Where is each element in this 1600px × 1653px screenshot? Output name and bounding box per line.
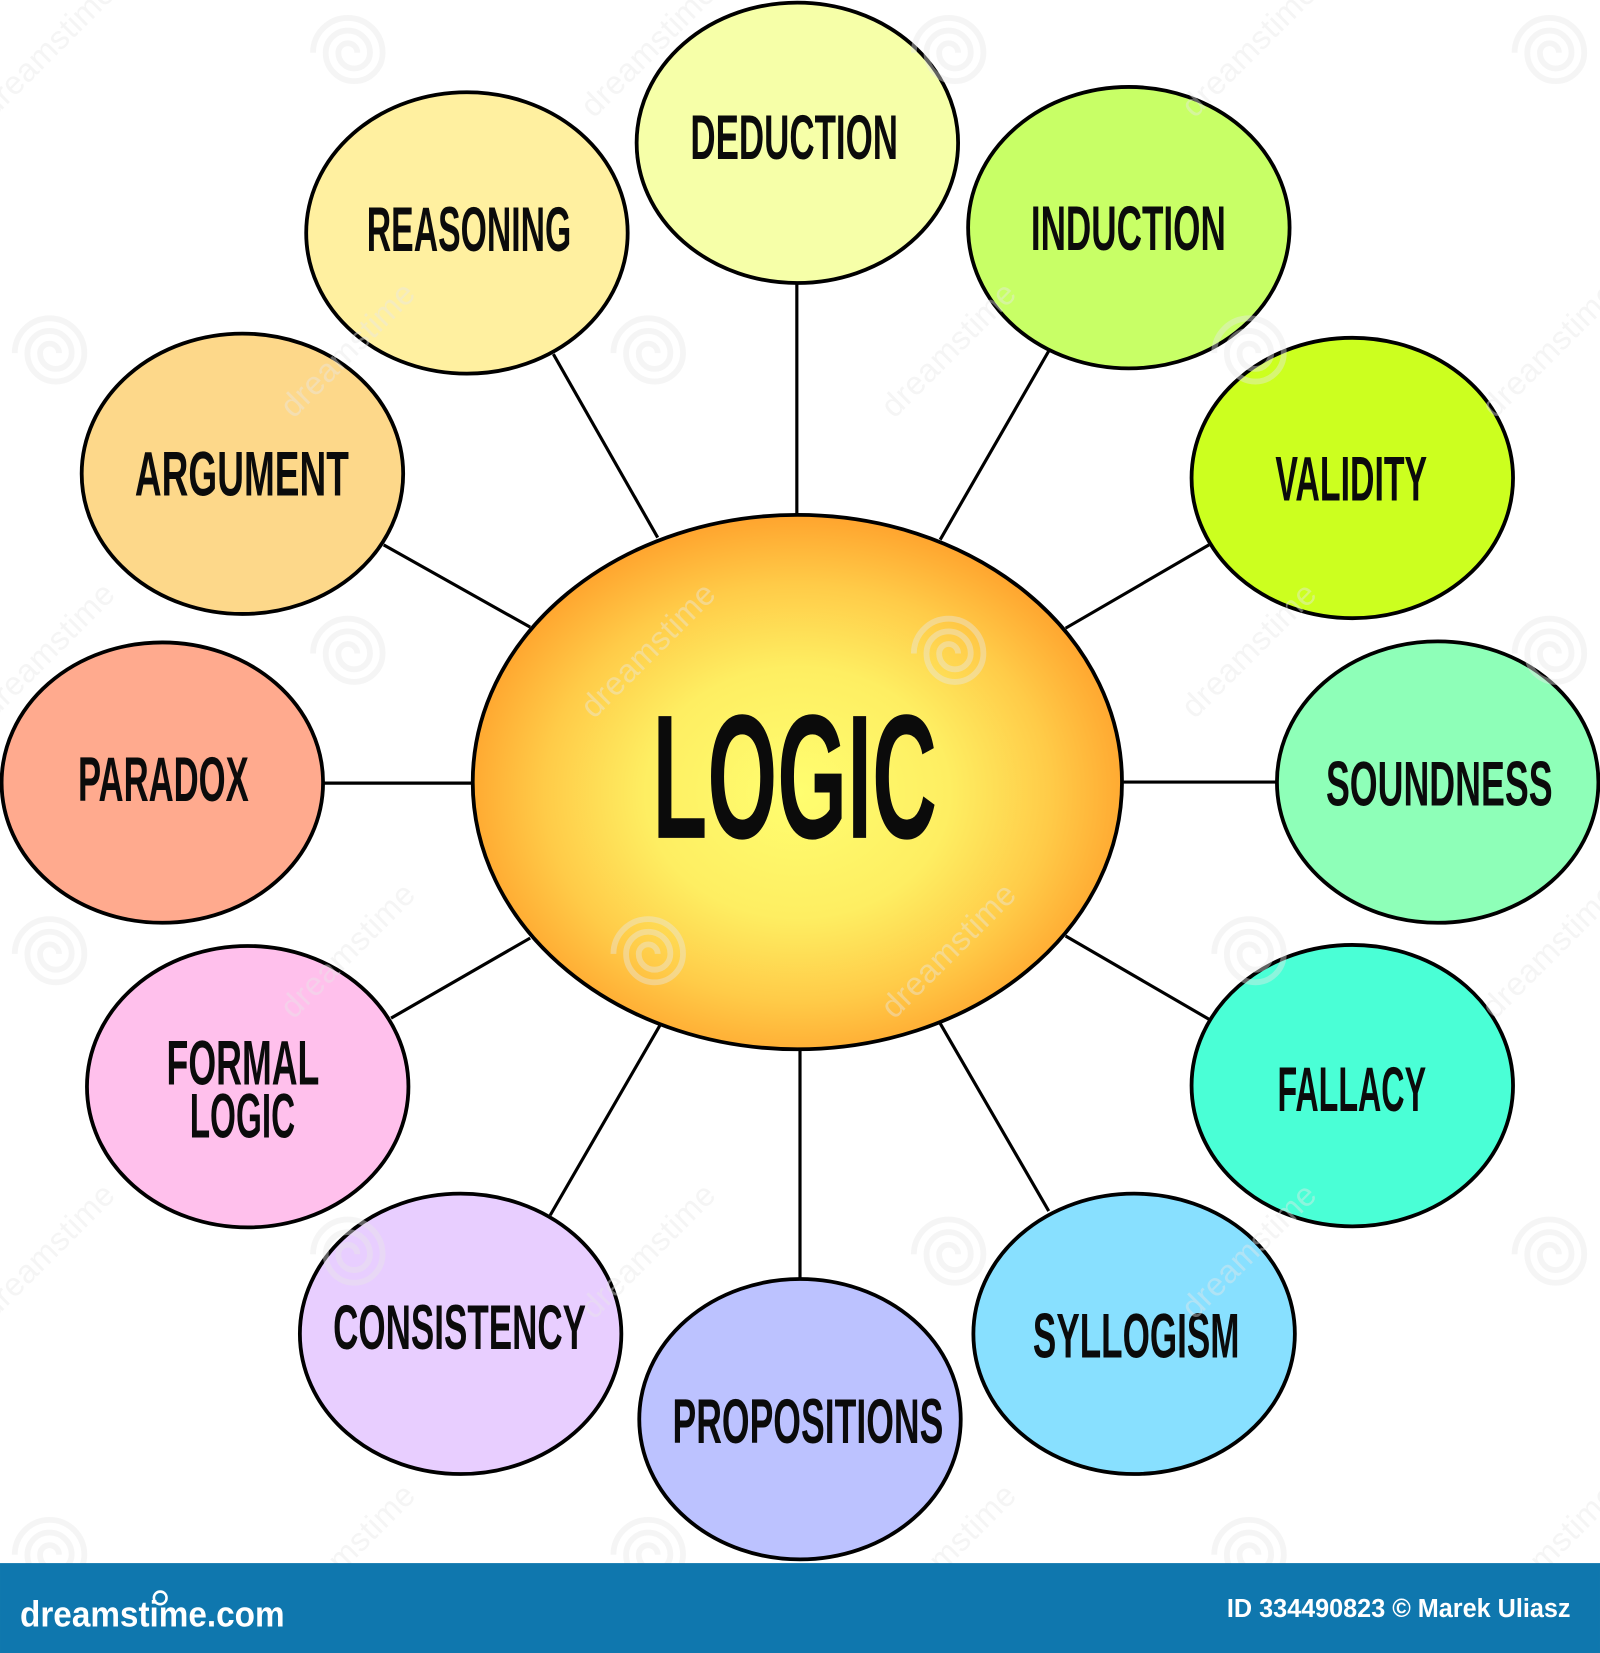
node: deduction: DEDUCTION xyxy=(690,103,898,173)
node: formal logic: FORMAL xyxy=(167,1029,319,1099)
footer bar xyxy=(0,1563,1600,1653)
watermark text: dreamstime xyxy=(873,875,1023,1025)
node: fallacy xyxy=(1192,945,1513,1226)
watermark text: dreamstime xyxy=(873,274,1023,424)
watermark text: dreamstime xyxy=(1173,575,1323,725)
watermark text: dreamstime xyxy=(272,274,422,424)
node: paradox xyxy=(2,642,323,923)
node: argument: ARGUMENT xyxy=(135,439,349,509)
node: induction: INDUCTION xyxy=(1031,194,1226,264)
node: propositions xyxy=(639,1279,961,1559)
node: argument xyxy=(82,334,403,614)
connector lines xyxy=(323,282,1277,1280)
watermark text: dreamstime xyxy=(1173,1175,1323,1325)
node: consistency xyxy=(300,1194,621,1474)
node: paradox: PARADOX xyxy=(78,745,249,815)
node: formal logic xyxy=(87,946,408,1227)
node: propositions: PROPOSITIONS xyxy=(672,1387,943,1457)
footer logo: dreamstime.com xyxy=(20,1594,285,1634)
node: reasoning: REASONING xyxy=(367,195,571,265)
node: reasoning xyxy=(306,92,628,374)
node: validity: VALIDITY xyxy=(1275,445,1427,515)
node: deduction xyxy=(637,3,958,283)
watermark text: dreamstime xyxy=(873,1476,1023,1626)
node: formal logic: LOGIC xyxy=(190,1081,295,1151)
central node: logic: LOGIC xyxy=(652,678,937,876)
node: syllogism xyxy=(973,1194,1295,1474)
node: soundness xyxy=(1277,641,1598,923)
watermark text: dreamstime xyxy=(573,575,722,725)
watermark text: dreamstime xyxy=(272,875,422,1025)
central node: logic xyxy=(473,515,1122,1049)
footer credit: ID 334490823 © Marek Uliasz xyxy=(1227,1593,1570,1623)
node: consistency: CONSISTENCY xyxy=(333,1293,586,1363)
watermark text: dreamstime xyxy=(573,1175,722,1325)
node: syllogism: SYLLOGISM xyxy=(1033,1302,1240,1372)
node: induction xyxy=(968,87,1290,368)
node: fallacy: FALLACY xyxy=(1277,1055,1426,1125)
node: validity xyxy=(1192,338,1513,618)
watermark text: dreamstime xyxy=(272,1476,422,1626)
